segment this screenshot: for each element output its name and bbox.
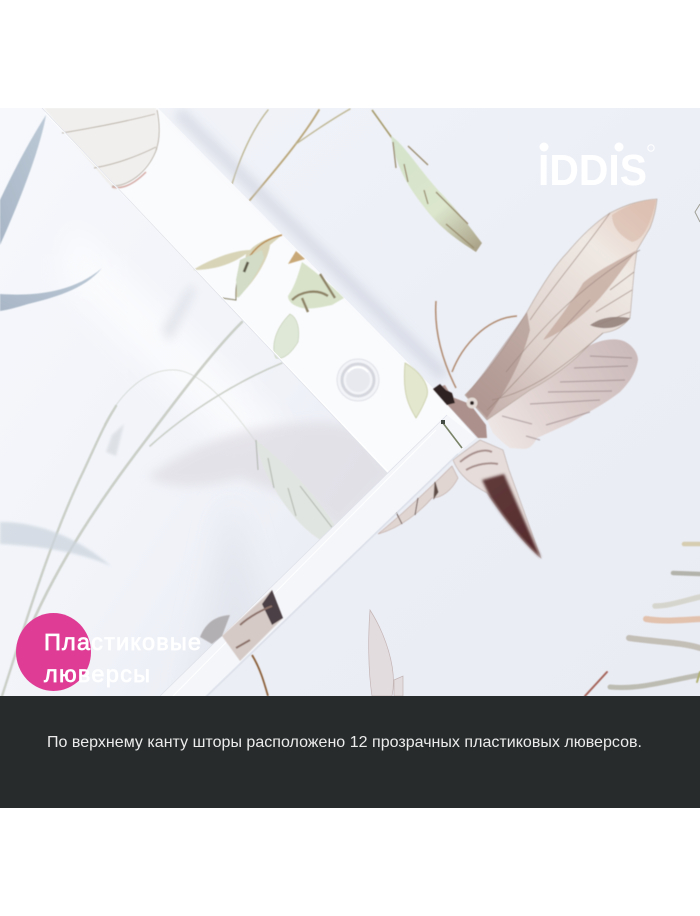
photo: shower curtain fabric bbox=[0, 108, 700, 697]
logo: IDDIS: IDDIS bbox=[538, 146, 647, 195]
pink blob badge bbox=[16, 613, 91, 691]
fore wing root patch bbox=[466, 312, 530, 418]
strip upper edge shadow bbox=[178, 112, 444, 376]
grain head on hem bbox=[274, 251, 344, 358]
faded moth wing through liner bbox=[154, 423, 386, 524]
leaf cluster on hem bbox=[193, 235, 282, 300]
abdomen dark tail bbox=[482, 474, 541, 558]
badge title bbox=[44, 629, 201, 687]
lower band bottom shadow bbox=[206, 454, 458, 697]
curtain hem: upper strip bbox=[42, 108, 476, 476]
faded grain head through liner bbox=[256, 440, 338, 546]
stitch line on strip bbox=[45, 112, 281, 359]
antennae bbox=[436, 301, 517, 388]
faded shadow mark 2 bbox=[106, 426, 124, 456]
fore wing veins bbox=[487, 213, 640, 410]
thread at band end bbox=[443, 423, 462, 448]
fore wing dark wedge bbox=[543, 250, 637, 340]
bottom leaf bbox=[369, 610, 403, 696]
grommet bbox=[337, 359, 379, 401]
moth fragment in lower band gap bbox=[200, 590, 283, 696]
thread knot bbox=[441, 420, 445, 424]
abdomen bands bbox=[460, 450, 498, 470]
hind wing stripes bbox=[502, 356, 632, 440]
lower band top edge bbox=[160, 415, 447, 696]
curtain hem: lower band bbox=[161, 454, 456, 696]
hind wing bbox=[487, 339, 638, 449]
lower band stitch bbox=[173, 430, 436, 696]
blue leaves on left bbox=[0, 115, 102, 311]
badge title: люверсы bbox=[44, 661, 150, 687]
faded grass stems seen through liner bbox=[2, 322, 282, 696]
fern strokes at right bbox=[585, 544, 700, 696]
moth bbox=[433, 199, 657, 449]
badge title: Пластиковые bbox=[44, 629, 201, 655]
fore wing tip patch bbox=[612, 200, 656, 242]
abdomen bbox=[453, 440, 541, 558]
lower wing bbox=[378, 466, 458, 534]
grass stems upper right bbox=[232, 109, 350, 200]
moth lower wing and abdomen bbox=[378, 440, 541, 558]
head tuft bbox=[433, 384, 455, 405]
moth head bbox=[433, 385, 487, 438]
dark caption bar bbox=[0, 696, 700, 808]
fabric background bbox=[158, 108, 700, 696]
strip lower shadow line bbox=[42, 108, 390, 476]
faded leaf blade through liner bbox=[0, 522, 111, 566]
faded shadow mark bbox=[162, 290, 193, 338]
lower wing dark mark bbox=[396, 482, 438, 524]
fore wing bbox=[465, 199, 657, 420]
pale leaf on hem bbox=[404, 363, 427, 418]
transparent wing fragment on hem bbox=[44, 108, 159, 190]
translucent curtain liner window bbox=[0, 108, 390, 696]
fore wing dark edge bbox=[590, 317, 630, 328]
small dark outline at right edge bbox=[695, 204, 700, 222]
fold shadow across liner bbox=[216, 406, 249, 632]
grain head top bbox=[372, 110, 482, 252]
moth eye bbox=[466, 398, 478, 408]
caption text: По верхнему канту шторы расположено 12 прозрачных пластиковых люверсов. bbox=[47, 734, 642, 751]
